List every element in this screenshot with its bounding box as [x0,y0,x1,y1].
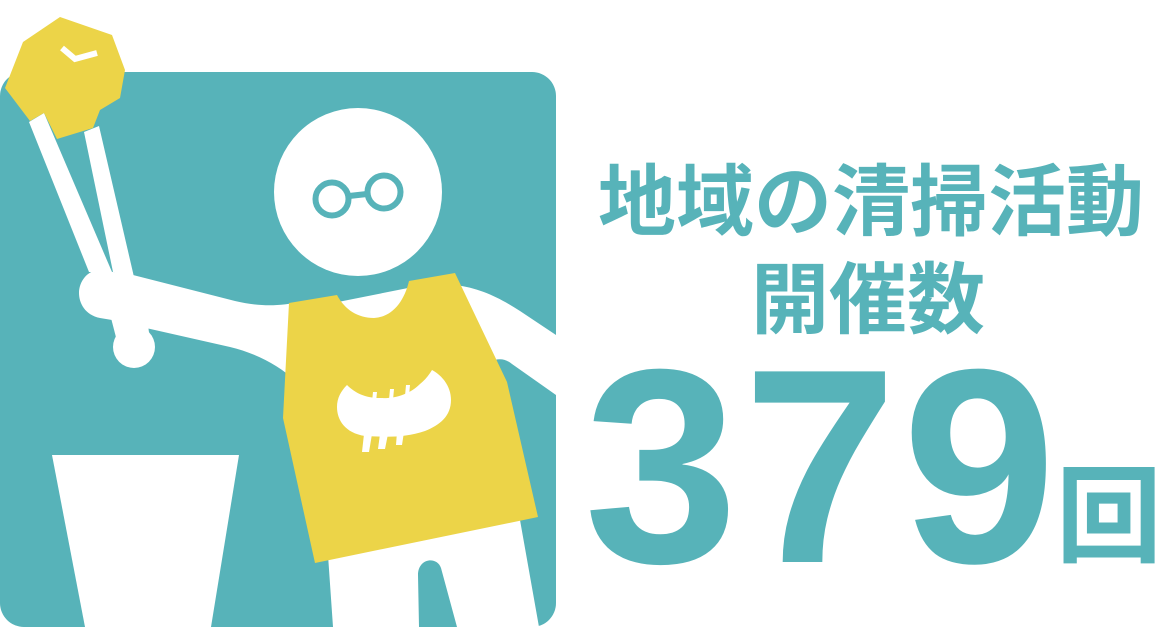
icon: trash can [52,455,239,627]
heading: line 2: 開催数 [751,256,985,344]
icon: yellow vest [283,273,538,563]
icon: tongs [29,113,134,277]
figure: neck [338,288,420,325]
figure: head [274,108,442,276]
figure: raised arm and hand [79,270,300,385]
figure: legs [328,520,539,627]
figure: lowered arm [450,285,556,395]
heading: line 1: 地域の清掃活動 [598,158,1144,246]
number: 379: 379 [584,311,1061,621]
icon: yellow grabber head [5,17,125,139]
illustration: volunteer picking up litter [0,17,556,627]
icon: glasses [316,176,400,216]
icon: canoe logo [337,370,451,452]
panel: teal background [0,72,556,627]
icon: clock hands on grabber [62,48,97,59]
